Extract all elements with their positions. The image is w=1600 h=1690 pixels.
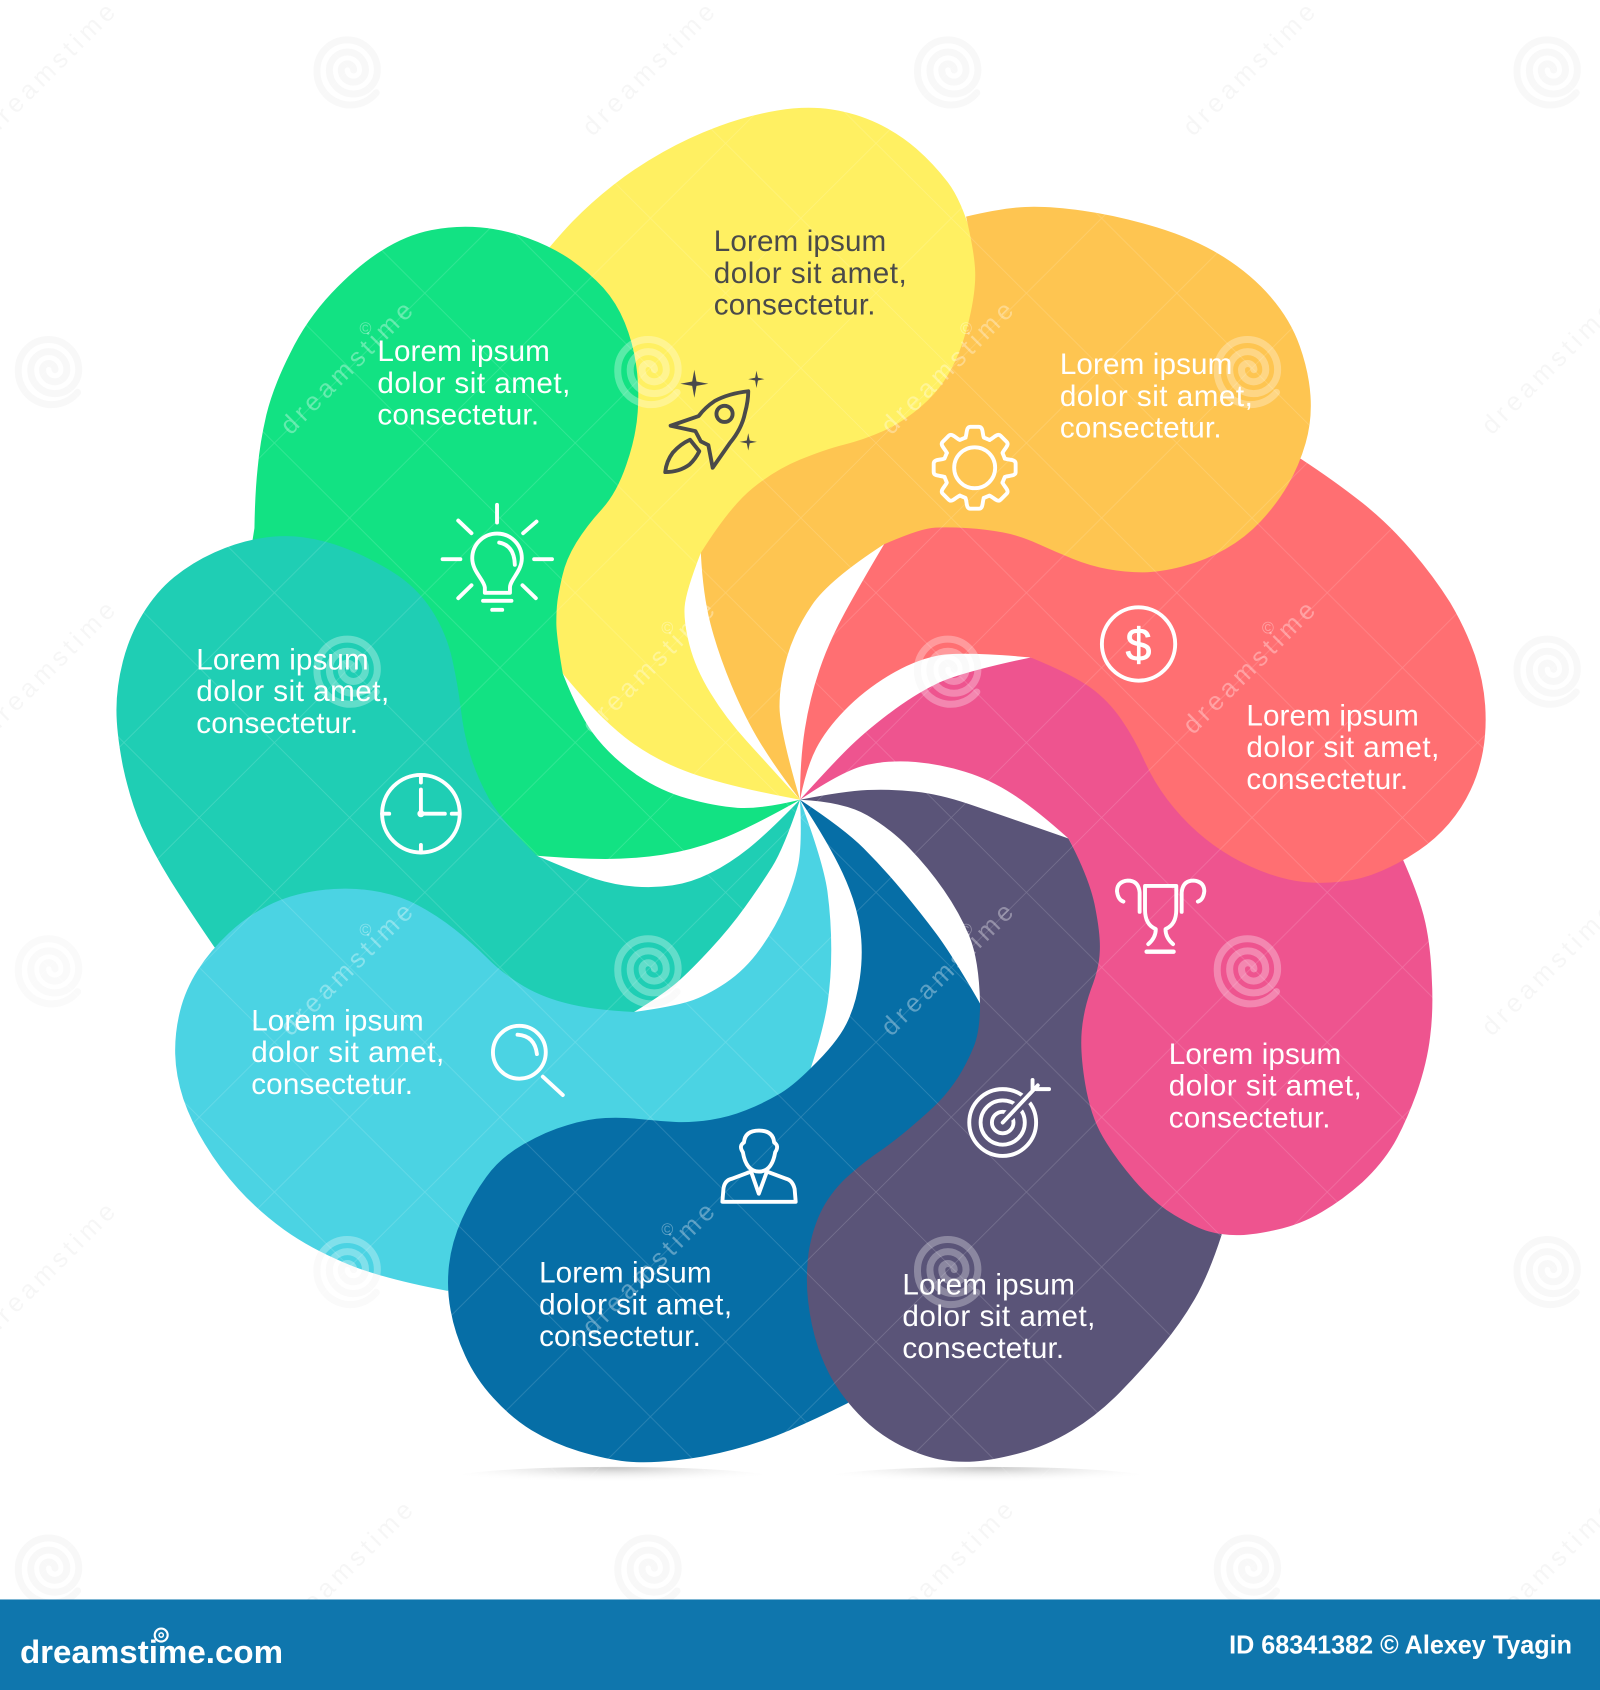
footer credit: ID 68341382 © Alexey Tyagin <box>1229 1631 1572 1659</box>
text: green petal: dolor sit amet, <box>377 367 570 400</box>
text: orange petal: dolor sit amet, <box>1060 380 1253 413</box>
text: cyan petal: Lorem ipsum <box>251 1004 424 1037</box>
ground shadows <box>451 1467 1151 1491</box>
text: cyan petal <box>251 1004 444 1101</box>
text: orange petal <box>1060 348 1253 445</box>
text: teal petal: dolor sit amet, <box>196 675 389 708</box>
text: pink petal <box>1169 1038 1362 1134</box>
text: green petal: Lorem ipsum <box>377 335 550 368</box>
text: teal petal <box>196 643 389 740</box>
text: red petal <box>1246 699 1439 796</box>
petal: orange <box>701 207 1311 800</box>
text: teal petal: Lorem ipsum <box>196 643 369 676</box>
text: blue petal: consectetur. <box>539 1320 701 1353</box>
petal: green <box>250 227 800 859</box>
text: green petal <box>377 335 570 432</box>
petal: yellow <box>539 108 987 800</box>
text: purple petal <box>902 1268 1095 1365</box>
text: red petal: dolor sit amet, <box>1246 731 1439 764</box>
watermark over petals: dreamstime <box>876 898 1019 1041</box>
icon: person <box>722 1131 796 1202</box>
icon: target <box>969 1080 1049 1156</box>
text: cyan petal: consectetur. <box>251 1068 413 1101</box>
watermark over petals: © <box>960 320 972 338</box>
watermark over petals: © <box>960 922 972 940</box>
petal: red <box>800 453 1486 883</box>
text: yellow petal <box>714 225 907 322</box>
watermark over petals: dreamstime <box>275 297 419 440</box>
icon: dollar coin <box>1102 607 1175 681</box>
text: yellow petal: dolor sit amet, <box>714 257 907 290</box>
petal: purple <box>800 790 1222 1462</box>
icon: dollar coin: $ <box>1126 619 1152 671</box>
icon: light bulb <box>443 505 552 610</box>
watermark on white background: dreamstime <box>876 1496 1019 1640</box>
watermark over petals: dreamstime <box>577 1198 720 1341</box>
text: purple petal: Lorem ipsum <box>902 1268 1075 1301</box>
watermark over petals: dreamstime <box>275 898 419 1041</box>
text: blue petal: dolor sit amet, <box>539 1288 732 1321</box>
watermark over petals: dreamstime <box>577 596 720 740</box>
watermark over petals: © <box>1262 620 1274 638</box>
watermark on white background: dreamstime <box>577 0 720 141</box>
text: pink petal: dolor sit amet, <box>1169 1070 1362 1103</box>
watermark over petals: dreamstime <box>1178 596 1321 740</box>
text: orange petal: consectetur. <box>1060 412 1222 445</box>
watermark over petals: © <box>661 620 673 638</box>
text: yellow petal: consectetur. <box>714 289 875 322</box>
icon: magnifier <box>493 1026 563 1095</box>
text: purple petal: consectetur. <box>902 1332 1064 1365</box>
text: cyan petal: dolor sit amet, <box>251 1036 444 1069</box>
text: pink petal: consectetur. <box>1169 1101 1330 1134</box>
text: green petal: consectetur. <box>377 399 539 432</box>
text: blue petal: Lorem ipsum <box>539 1257 712 1290</box>
watermark over petals: dreamstime <box>876 297 1019 440</box>
text: pink petal: Lorem ipsum <box>1169 1038 1341 1071</box>
footer bar <box>0 1599 1600 1690</box>
icon: clock <box>382 775 460 853</box>
petal: cyan <box>175 800 831 1291</box>
watermark on white background: dreamstime <box>1178 0 1321 141</box>
watermark on white background: dreamstime <box>275 1496 419 1640</box>
petal: pink <box>800 657 1432 1235</box>
text: blue petal <box>539 1257 732 1353</box>
icon: rocket <box>665 370 764 472</box>
petal: blue <box>448 800 1003 1462</box>
petal: teal <box>116 536 800 1035</box>
icon: gear <box>934 427 1016 509</box>
text: yellow petal: Lorem ipsum <box>714 225 886 258</box>
text: teal petal: consectetur. <box>196 707 358 740</box>
text: purple petal: dolor sit amet, <box>902 1300 1095 1333</box>
watermark over petals: © <box>360 922 372 940</box>
icon: trophy <box>1117 881 1204 952</box>
footer logo: dreamstime.com <box>20 1634 283 1670</box>
watermark over petals: © <box>661 1221 673 1239</box>
swirl petals <box>116 108 1486 1462</box>
text: orange petal: Lorem ipsum <box>1060 348 1232 381</box>
text: red petal: consectetur. <box>1246 763 1408 796</box>
text: red petal: Lorem ipsum <box>1246 699 1419 732</box>
watermark over petals: © <box>360 320 372 338</box>
